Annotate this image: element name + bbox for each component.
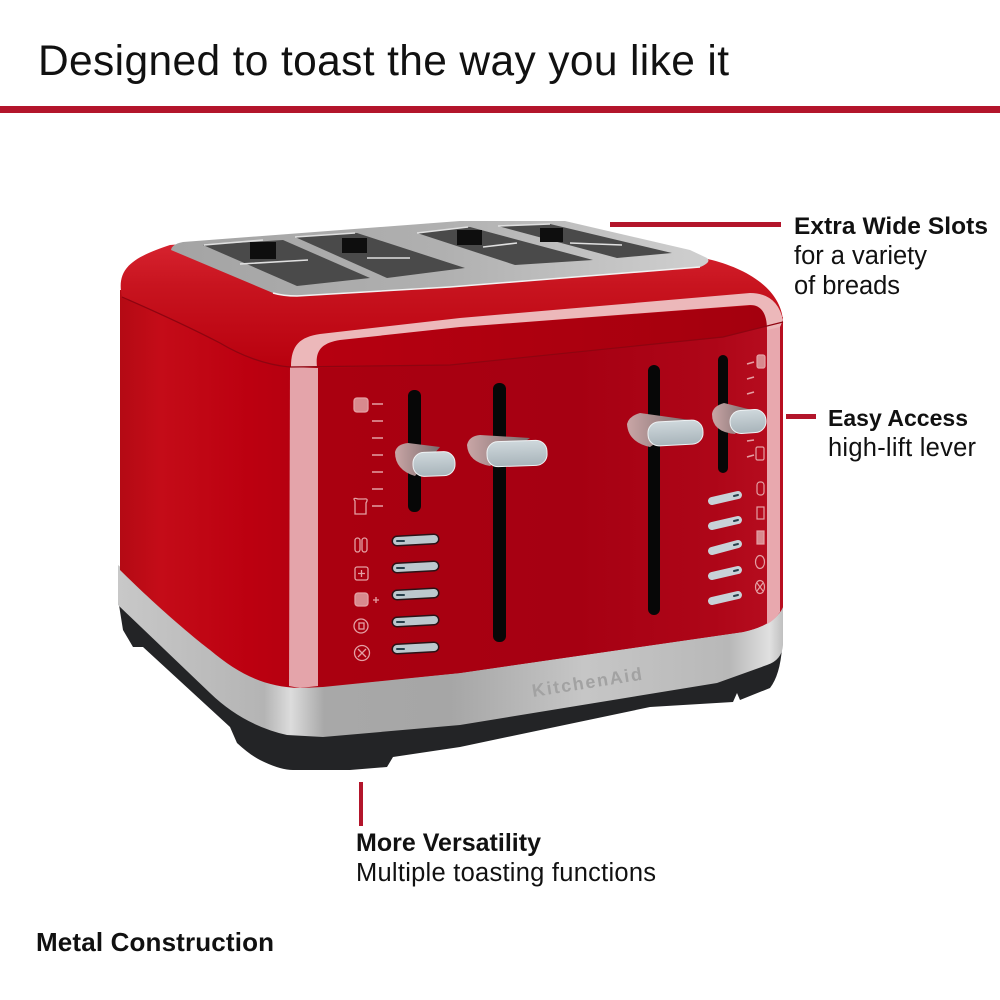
slot 3 — [417, 227, 593, 265]
slot 1 — [203, 240, 370, 286]
callout: easy access: Easy Access — [828, 405, 968, 431]
lever handles — [395, 403, 767, 477]
callout: extra wide slots: Extra Wide Slots — [794, 213, 988, 240]
lid — [121, 224, 783, 368]
scale ticks and icons left — [354, 398, 383, 660]
function buttons left — [397, 539, 434, 649]
callout: more versatility: Multiple toasting functions — [356, 859, 656, 887]
lid underside panel — [317, 305, 767, 367]
black base — [119, 605, 782, 770]
title: Designed to toast the way you like it — [38, 38, 729, 85]
slider slots — [408, 355, 728, 642]
callout: more versatility: More Versatility — [356, 829, 541, 857]
callout: easy access: high-lift lever — [828, 434, 976, 462]
function buttons right — [712, 495, 738, 601]
scale ticks and icons right — [747, 355, 765, 594]
header rule — [0, 106, 1000, 113]
footer label: Metal Construction — [36, 927, 274, 957]
front panel — [318, 317, 783, 687]
callout: more versatility — [356, 782, 656, 887]
top plate — [171, 221, 708, 296]
slot 4 — [498, 224, 672, 258]
callout: extra wide slots: of breads — [794, 272, 900, 300]
seam line — [122, 297, 783, 367]
slot 2 — [295, 233, 465, 278]
plate front edge — [273, 267, 700, 296]
body side and front — [120, 290, 783, 688]
lid highlight band — [291, 293, 783, 367]
callout: easy access — [786, 405, 976, 462]
front corner highlight — [289, 365, 318, 688]
callout: extra wide slots: for a variety — [794, 242, 927, 270]
brand on steel band: KitchenAid — [530, 664, 643, 701]
stainless steel band — [118, 565, 783, 737]
callout: extra wide slots — [610, 213, 988, 300]
toaster illustration — [118, 221, 783, 770]
right corner highlight — [767, 315, 780, 624]
